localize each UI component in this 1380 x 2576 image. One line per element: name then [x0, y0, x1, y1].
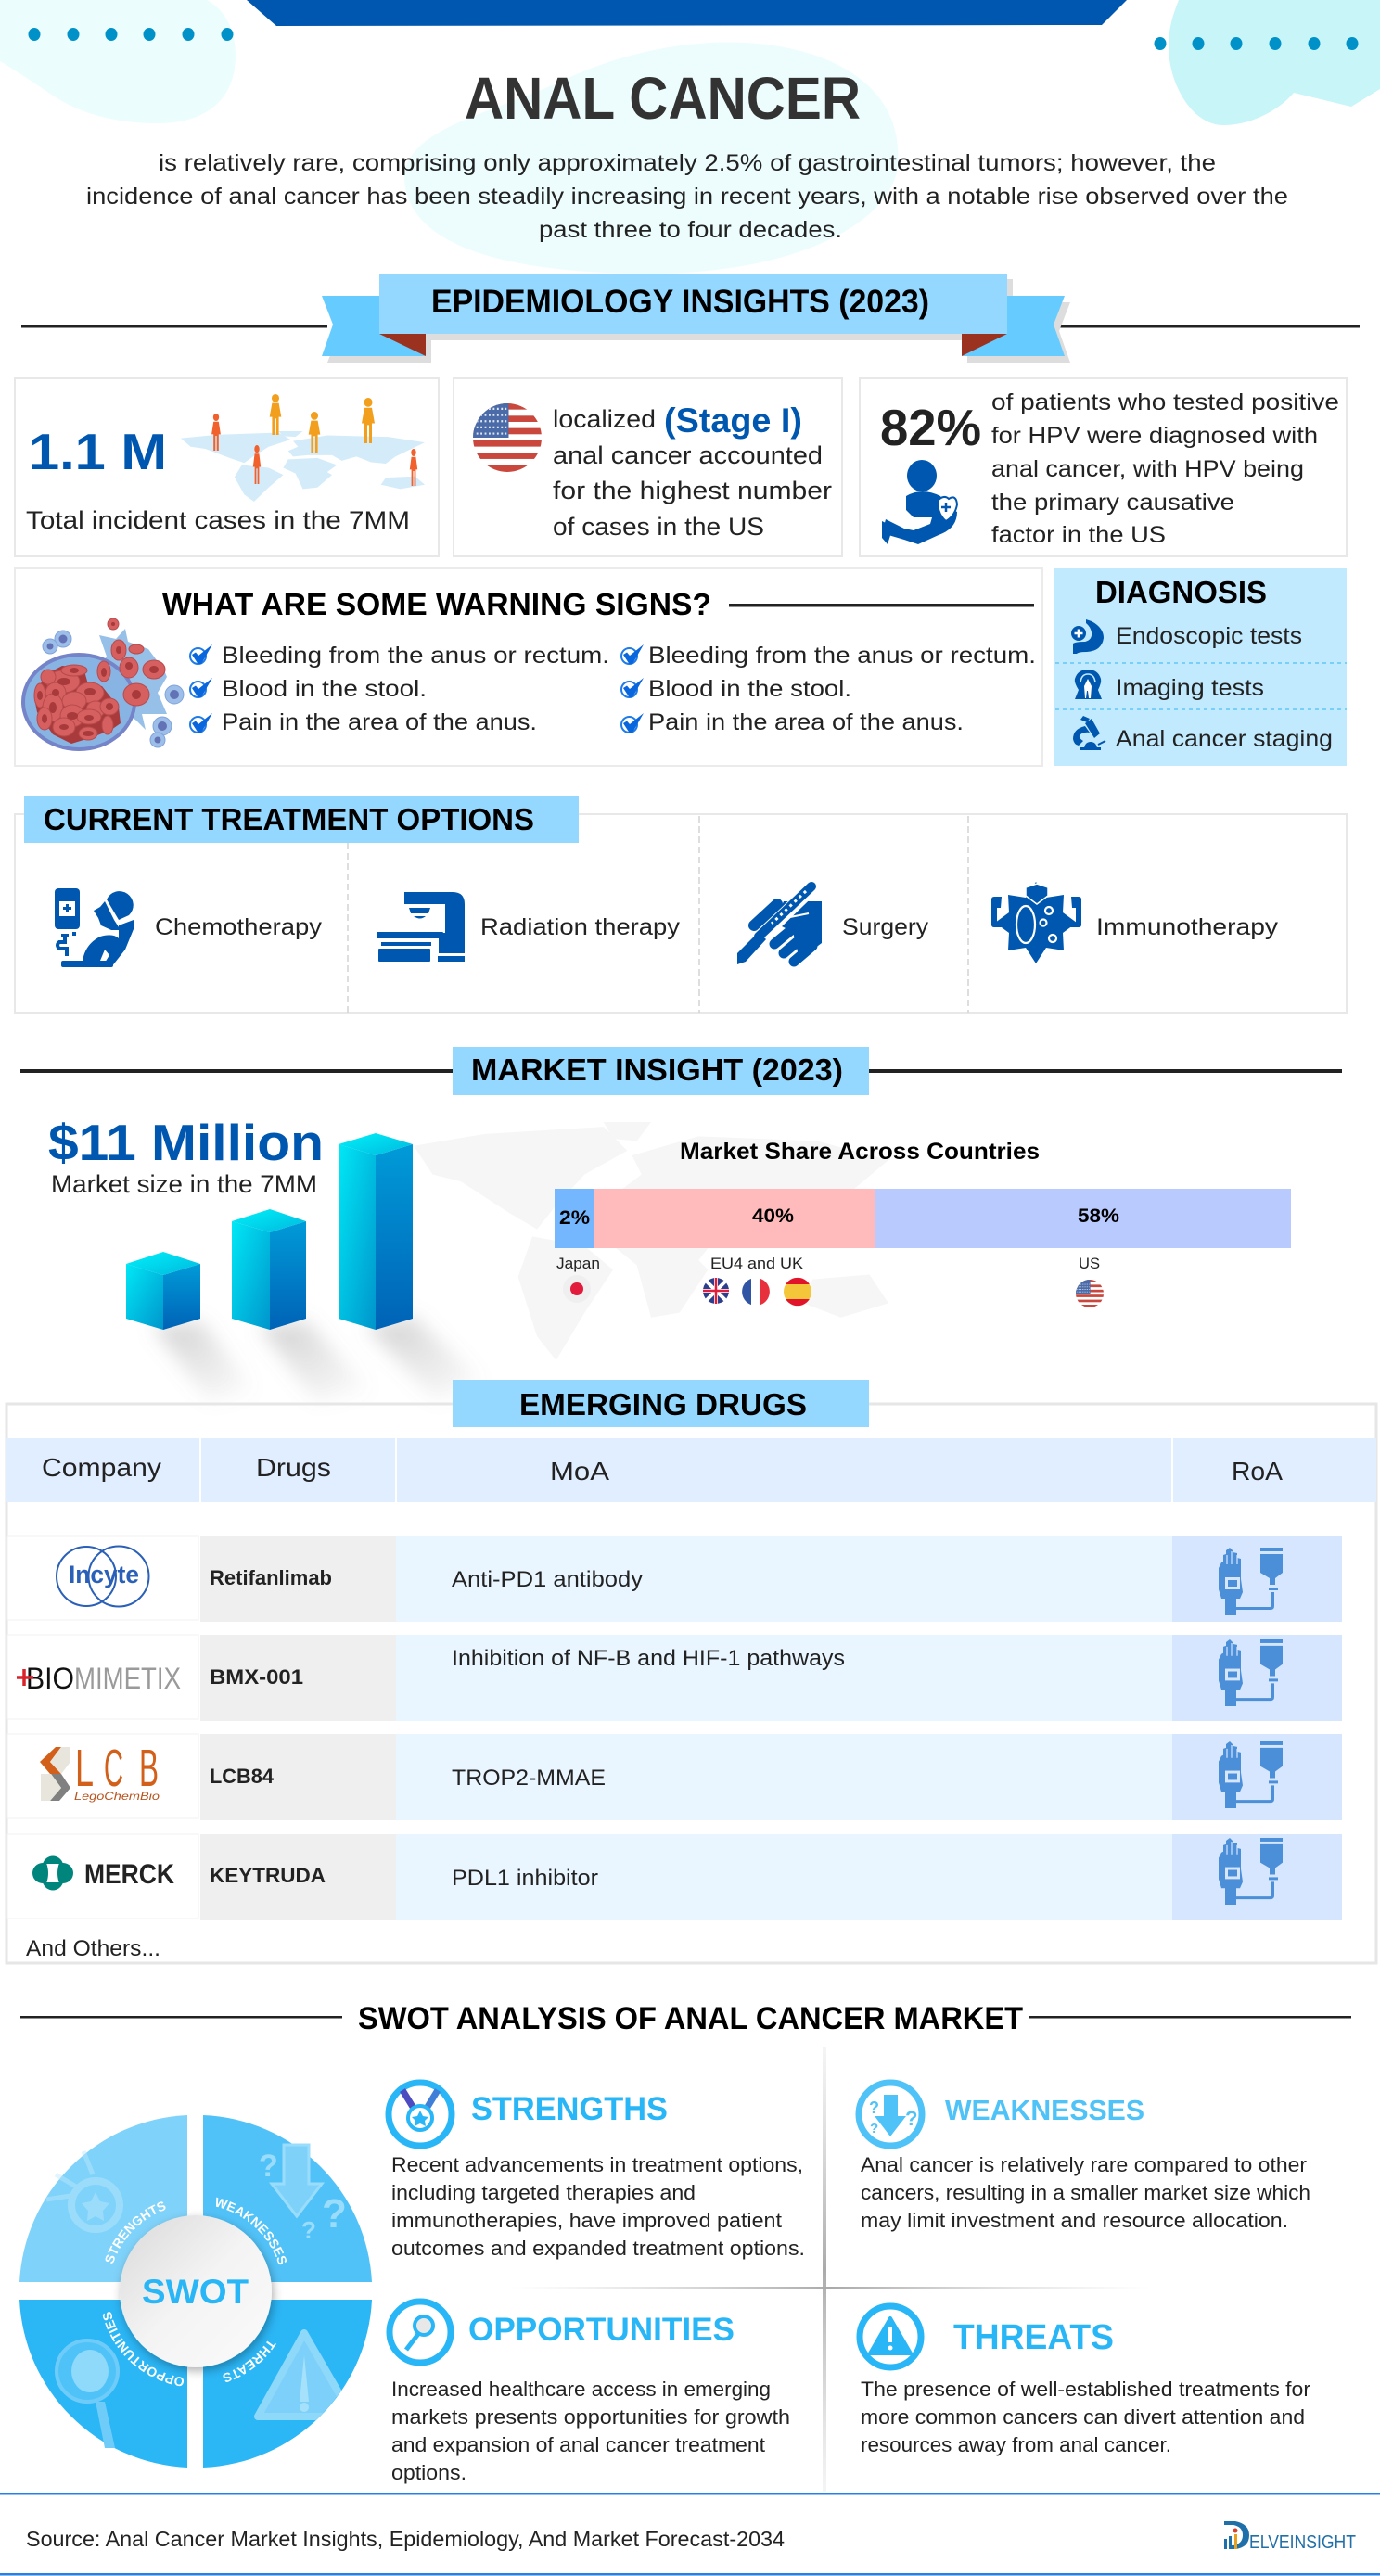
table header: Drugs — [256, 1453, 331, 1482]
row: Merck: PDL1 inhibitor — [452, 1866, 598, 1891]
illustration: tumour cells — [21, 618, 184, 751]
block: strengths: outcomes and expanded treatment options. — [391, 2237, 805, 2260]
block: strengths: immunotherapies, have improved patient — [391, 2209, 783, 2232]
flag: UK — [703, 1278, 729, 1304]
heading: DIAGNOSIS — [1095, 575, 1267, 609]
note: and others: And Others... — [26, 1936, 160, 1961]
row: Incyte: Anti-PD1 antibody — [452, 1567, 643, 1592]
section heading: market insight — [20, 1047, 1342, 1095]
chart: market share across countries: 2% — [559, 1207, 590, 1229]
faded icon: warning triangle — [258, 2333, 352, 2417]
row: LCB — [7, 1734, 1342, 1820]
block: opportunities: OPPORTUNITIES — [468, 2312, 735, 2348]
section banner: epidemiology insights — [21, 274, 1360, 363]
block: strengths: Recent advancements in treatment options, — [391, 2153, 803, 2176]
caption: Total incident cases in the 7MM — [26, 506, 410, 534]
block: opportunities: Increased healthcare access in emerging — [391, 2378, 771, 2401]
faded icon: magnifier — [57, 2340, 118, 2448]
center disc: SWOT — [142, 2273, 249, 2311]
logo: Merck: MERCK — [84, 1859, 174, 1890]
block: weaknesses — [859, 2083, 1310, 2232]
logo: Biomimetix — [17, 1662, 181, 1695]
panel: diagnosis: Endoscopic tests — [1116, 623, 1302, 649]
stage text: for the highest number — [553, 477, 832, 504]
row: Incyte: Retifanlimab — [210, 1566, 332, 1589]
chart: market share across countries: 40% — [752, 1205, 794, 1227]
sector labels: THREATS — [223, 2340, 276, 2382]
market size stat: $11 Million — [48, 1114, 324, 1171]
heading: CURRENT TREATMENT OPTIONS — [44, 802, 534, 836]
flag: Spain — [784, 1278, 811, 1306]
warning list left — [190, 643, 609, 735]
icon: down arrow — [859, 2083, 922, 2146]
banner heading: EPIDEMIOLOGY INSIGHTS (2023) — [431, 284, 929, 320]
icon: chemotherapy — [55, 888, 134, 967]
sector labels: STRENGHTS — [106, 2201, 165, 2264]
heading: WHAT ARE SOME WARNING SIGNS? — [162, 587, 711, 621]
logo: Biomimetix: MIMETIX — [74, 1662, 181, 1695]
HPV text: of patients who tested positive — [991, 389, 1339, 415]
panel: warning signs — [15, 568, 1042, 766]
faded icon: arrow and question marks: ? — [322, 2191, 347, 2237]
flag: Japan — [563, 1275, 591, 1303]
warning list left: Blood in the stool. — [222, 676, 427, 702]
panel: diagnosis — [1054, 568, 1347, 766]
panel: current treatment options — [15, 796, 1347, 1013]
stage text: anal cancer accounted — [553, 441, 823, 469]
block: opportunities: options. — [391, 2461, 466, 2484]
icon: down arrow: ? — [905, 2107, 917, 2130]
faded icon: arrow and question marks: ? — [301, 2216, 316, 2244]
card: stage I — [454, 378, 842, 556]
warning list right — [621, 643, 1036, 735]
panel: diagnosis: Anal cancer staging — [1116, 726, 1333, 752]
center disc — [120, 2215, 272, 2367]
card: 82% HPV — [860, 378, 1347, 556]
source: Source: Anal Cancer Market Insights, Epidemiology, And Market Forecast-2034 — [26, 2527, 785, 2551]
icon: person with heart — [882, 460, 957, 544]
block: strengths: including targeted therapies and — [391, 2181, 696, 2204]
logo: LegoChemBio: LegoChemBio — [74, 1790, 160, 1803]
section heading: SWOT analysis: SWOT ANALYSIS OF ANAL CANCER MARKET — [358, 2001, 1023, 2036]
decorative dots left — [28, 28, 234, 41]
heading: EMERGING DRUGS — [519, 1387, 807, 1422]
block: weaknesses: cancers, resulting in a smaller market size which — [861, 2181, 1310, 2204]
faded icon: medal — [46, 2151, 120, 2229]
warning list right: Pain in the area of the anus. — [648, 709, 964, 735]
icon: down arrow: ? — [869, 2098, 879, 2117]
logo: LegoChemBio — [40, 1739, 160, 1803]
block: threats: more common cancers can divert attention and — [861, 2405, 1305, 2429]
row: Biomimetix — [7, 1635, 1342, 1721]
row: Merck — [7, 1834, 1342, 1920]
chart: SWOT wheel — [19, 2115, 372, 2468]
top header band — [247, 0, 1127, 26]
stage text: (Stage I) — [664, 402, 802, 440]
block: opportunities: and expansion of anal cancer treatment — [391, 2433, 766, 2456]
logo: Biomimetix: BIO — [26, 1662, 74, 1695]
background world map — [414, 1122, 888, 1360]
panel: diagnosis: Imaging tests — [1116, 675, 1264, 701]
heading — [453, 1380, 869, 1427]
card: incident cases — [15, 378, 439, 556]
HPV text: anal cancer, with HPV being — [991, 456, 1304, 482]
block: opportunities: markets presents opportunities for growth — [391, 2405, 790, 2429]
block: opportunities — [390, 2302, 790, 2484]
panel: current treatment options: Surgery — [842, 914, 929, 940]
stage text: of cases in the US — [553, 513, 764, 541]
icon: immunotherapy — [991, 882, 1081, 963]
sector labels: OPPORTUNITIES — [102, 2312, 184, 2387]
row: Biomimetix: BMX-001 — [210, 1665, 303, 1689]
intro paragraph: is relatively rare, comprising only approximately 2.5% of gastrointestinal tumors; however, the — [159, 150, 1216, 176]
table header: RoA — [1232, 1457, 1283, 1486]
icon: warning — [860, 2306, 921, 2367]
icon: microscope — [1073, 716, 1105, 750]
panel: current treatment options: Radiation therapy — [480, 914, 681, 940]
row: LCB: TROP2-MMAE — [452, 1766, 606, 1791]
intro paragraph — [86, 150, 1288, 243]
block: threats: resources away from anal cancer. — [861, 2433, 1171, 2456]
icon: down arrow: ? — [870, 2121, 878, 2136]
background blobs — [0, 0, 1380, 274]
table header: Company — [42, 1453, 161, 1482]
block: weaknesses: may limit investment and resource allocation. — [861, 2209, 1288, 2232]
block: threats: THREATS — [953, 2318, 1114, 2357]
panel: emerging drugs — [6, 1380, 1376, 1963]
HPV text: factor in the US — [991, 522, 1166, 548]
table header: MoA — [550, 1457, 609, 1486]
warning list left: Bleeding from the anus or rectum. — [222, 643, 609, 669]
logo: Merck — [32, 1855, 174, 1891]
logo: Incyte — [57, 1547, 148, 1606]
HPV text: the primary causative — [991, 490, 1234, 516]
block: strengths: STRENGTHS — [471, 2091, 668, 2127]
logo: Incyte: Incyte — [69, 1561, 139, 1588]
chart: market share across countries — [555, 1139, 1291, 1307]
logo: LegoChemBio: C — [104, 1739, 123, 1798]
table header — [6, 1435, 1376, 1502]
row: Biomimetix: Inhibition of NF-B and HIF-1 pathways — [452, 1646, 845, 1671]
stat: 82%: 82% — [880, 399, 981, 456]
icon: medal — [389, 2083, 452, 2146]
faded icon: arrow and question marks: ? — [259, 2149, 278, 2184]
logo: DelveInsight — [1224, 2521, 1356, 2553]
row: LCB: LCB84 — [210, 1765, 275, 1788]
decorative dots right — [1154, 37, 1358, 50]
block: weaknesses: Anal cancer is relatively rare compared to other — [861, 2153, 1308, 2176]
flag: US — [1076, 1280, 1104, 1307]
warning list right: Blood in the stool. — [648, 676, 851, 702]
block: strengths — [389, 2083, 805, 2260]
heading — [24, 796, 579, 843]
sector labels: WEAKNESSES — [216, 2198, 287, 2264]
section heading: market insight: MARKET INSIGHT (2023) — [471, 1052, 843, 1087]
icon: endoscopy — [1071, 619, 1104, 654]
footer — [0, 2493, 1380, 2576]
market size stat: Market size in the 7MM — [51, 1170, 317, 1198]
icon: surgery — [737, 886, 822, 964]
chart: market share across countries: EU4 and UK — [710, 1255, 804, 1272]
intro paragraph: past three to four decades. — [539, 217, 842, 243]
warning list right: Bleeding from the anus or rectum. — [648, 643, 1036, 669]
stage text — [553, 402, 832, 541]
logo: LegoChemBio: L — [75, 1739, 94, 1798]
chart: market share across countries: Japan — [556, 1255, 600, 1272]
icon: imaging machine — [1075, 670, 1102, 699]
block: weaknesses: WEAKNESSES — [945, 2094, 1144, 2126]
block: threats — [860, 2306, 1311, 2456]
icon: magnifier — [390, 2302, 451, 2363]
stat: 1.1 M: 1.1 M — [29, 423, 167, 480]
market size stat — [48, 1114, 324, 1198]
chart: market share across countries: 58% — [1078, 1205, 1119, 1227]
title: ANAL CANCER — [465, 65, 861, 132]
row: Incyte — [7, 1536, 1342, 1622]
icon: radiation therapy — [377, 892, 465, 962]
chart: market share across countries: Market Share Across Countries — [680, 1139, 1040, 1165]
row: Merck: KEYTRUDA — [210, 1864, 326, 1887]
bar chart: market growth — [126, 1133, 482, 1400]
warning list left: Pain in the area of the anus. — [222, 709, 537, 735]
logo: LegoChemBio: B — [139, 1739, 159, 1798]
dividers — [511, 2047, 1150, 2492]
world map with people icons — [181, 394, 425, 502]
block: threats: The presence of well-established treatments for — [861, 2378, 1311, 2401]
panel: current treatment options: Chemotherapy — [155, 914, 323, 940]
faded icon: arrow and question marks — [259, 2145, 347, 2244]
HPV text: for HPV were diagnosed with — [991, 423, 1318, 449]
chart: market share across countries: US — [1079, 1255, 1100, 1272]
HPV text — [991, 389, 1339, 548]
stage text: localized — [553, 405, 656, 433]
intro paragraph: incidence of anal cancer has been steadily increasing in recent years, with a notable rise observed over the — [86, 184, 1288, 210]
logo: DelveInsight: ELVEINSIGHT — [1249, 2532, 1356, 2553]
panel: current treatment options: Immunotherapy — [1096, 914, 1279, 940]
icon: US flag — [473, 403, 542, 472]
sector labels — [102, 2198, 287, 2387]
flag: France — [742, 1278, 770, 1306]
